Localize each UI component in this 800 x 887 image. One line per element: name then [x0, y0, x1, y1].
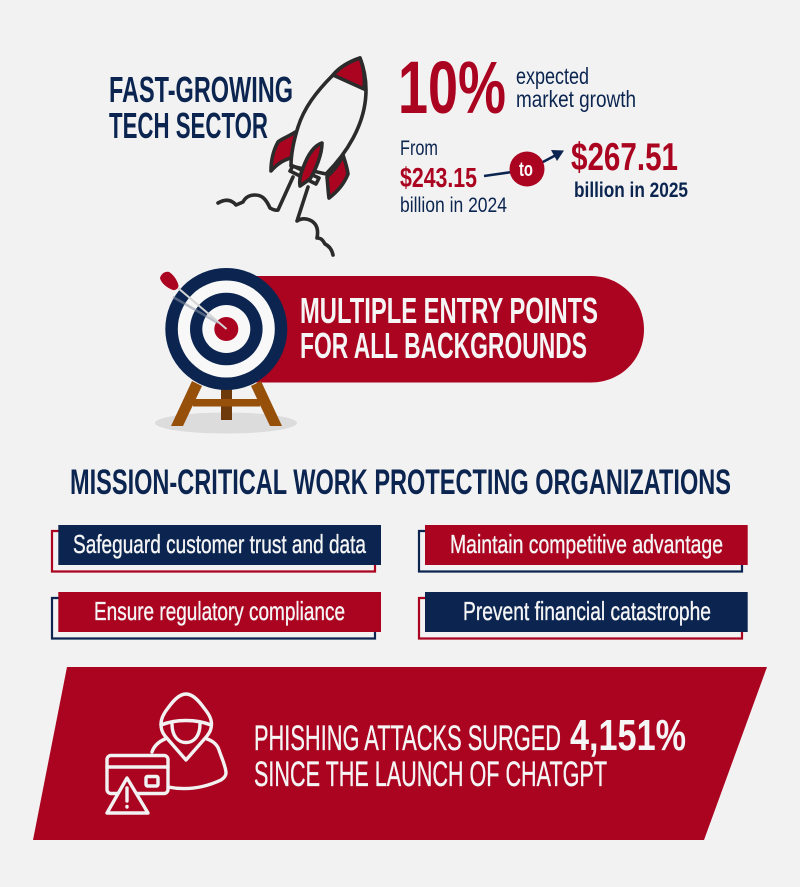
box: ensure regulatory compliance	[52, 592, 381, 638]
stat: from $243.15 billion in 2024: billion in 2024	[400, 194, 507, 217]
banner: multiple entry points	[226, 276, 644, 382]
title: fast-growing tech sector	[109, 69, 293, 146]
panel: phishing attacks callout	[33, 667, 767, 840]
text: phishing statistic: 4,151%	[570, 711, 686, 760]
stat: $267.51 billion in 2025: $267.51	[571, 136, 678, 179]
stat: from $243.15 billion in 2024: From	[400, 137, 438, 160]
stat: 10% expected market growth: market growth	[516, 86, 636, 112]
banner: multiple entry points: MULTIPLE ENTRY POINTS	[300, 290, 598, 331]
arrow: growth arrow with to badge: to	[519, 159, 533, 181]
stat: from $243.15 billion in 2024: $243.15	[400, 162, 477, 193]
icon: rocket	[218, 58, 366, 255]
box: safeguard customer trust and data: Safeguard customer trust and data	[73, 529, 366, 559]
banner: multiple entry points: FOR ALL BACKGROUNDS	[300, 325, 587, 366]
title: fast-growing tech sector: TECH SECTOR	[109, 105, 268, 146]
title: fast-growing tech sector: FAST-GROWING	[109, 69, 293, 110]
box: ensure regulatory compliance: Ensure regulatory compliance	[94, 596, 345, 626]
icon: target with dart on easel	[155, 268, 297, 434]
stat: 10% expected market growth	[398, 46, 636, 129]
stat: $267.51 billion in 2025	[571, 136, 688, 202]
text: phishing statistic: PHISHING ATTACKS SURGED	[254, 719, 561, 758]
arrow: growth arrow with to badge	[484, 150, 564, 186]
box: safeguard customer trust and data	[52, 525, 381, 572]
box: prevent financial catastrophe: Prevent financial catastrophe	[463, 596, 711, 626]
stat: 10% expected market growth: expected	[516, 63, 589, 89]
stat: 10% expected market growth: 10%	[398, 46, 506, 129]
box: prevent financial catastrophe	[419, 592, 748, 638]
stat: from $243.15 billion in 2024	[400, 137, 507, 217]
text: phishing statistic	[254, 711, 686, 794]
stat: $267.51 billion in 2025: billion in 2025	[574, 179, 688, 202]
icon: hooded hacker with card and warning	[107, 694, 226, 813]
box: maintain competitive advantage	[419, 525, 748, 572]
